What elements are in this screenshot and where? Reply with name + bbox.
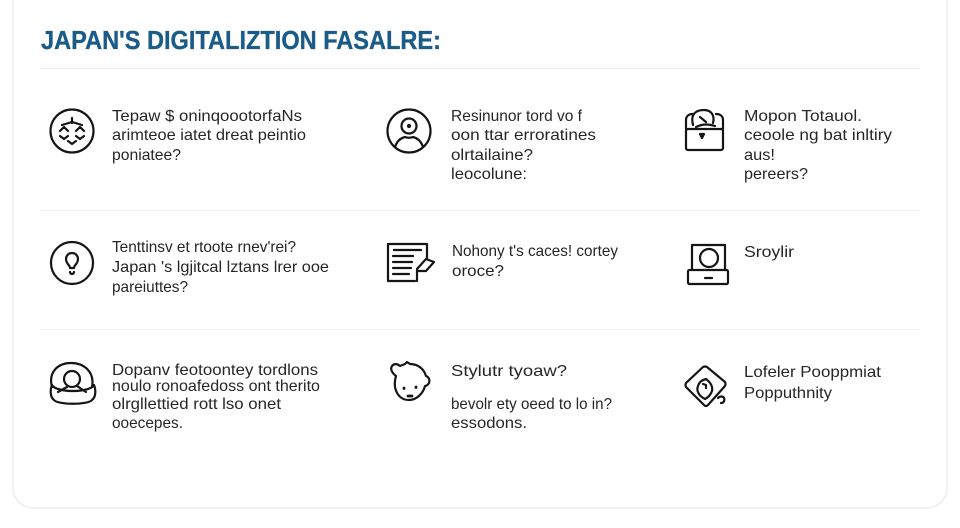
item: row 2 column 3 [688,244,795,284]
text block: pareiuttes? [112,279,188,296]
text block: leocolune: [451,166,527,183]
text block: ceoole ng bat inltiry [744,127,892,144]
item: row 1 column 2 [388,108,596,183]
text block: noulo ronoafedoss ont therito [112,378,320,395]
text block: Tepaw $ oninqoootorfaNs [112,108,302,125]
icon: light bulb in circle [51,242,93,284]
icon: diamond with drop [686,366,726,406]
text block [744,364,882,402]
text block: Sroylir [744,244,795,261]
icon: baby face [391,362,429,400]
text block: Nohony t's caces! cortey [452,243,618,260]
text block: arimteoe iatet dreat peintio [112,127,306,144]
text block: oroce? [452,263,504,280]
icon: bag [686,110,723,150]
item: row 2 column 1 [51,239,329,296]
text block [744,108,892,183]
title: JAPAN'S DIGITALIZTION FASALRE: [41,25,441,55]
text block: Mopon Totauol. [744,108,862,125]
text block: Tenttinsv et rtoote rnev'rei? [112,239,296,256]
icon: person in dome [51,363,95,404]
icon: device with circle [688,245,728,284]
text block [451,108,596,183]
item: row 3 column 1 [51,362,320,432]
item: row 1 column 1 [50,108,306,164]
text block [112,239,329,296]
item: row 2 column 2 [388,243,618,281]
text block: Dopanv feotoontey tordlons [112,362,318,379]
item: row 3 column 2 [391,362,612,432]
text block [451,363,612,432]
text block: Resinunor tord vo f [451,108,583,125]
text block: olrtailaine? [451,147,533,164]
text block: bevolr ety oeed to lo in? [451,396,612,413]
text block: Lofeler Pooppmiat [744,364,882,381]
icon: person in circle [388,110,430,152]
text block [112,362,320,432]
text block: Japan 's lgjitcal lztans lrer ooe [112,259,329,276]
text block [112,108,306,164]
icon: document with pen [388,244,434,281]
icon: circular arrows [50,110,94,152]
text block [452,243,618,280]
text block: olrgllettied rott lso onet [112,396,282,413]
text block: ooecepes. [112,415,183,432]
text block: Stylutr tyoaw? [451,363,567,380]
text block: poniatee? [112,147,181,164]
text block: pereers? [744,166,808,183]
item: row 3 column 3 [686,364,882,406]
text block: aus! [744,147,775,164]
text block: essodons. [451,415,527,432]
item: row 1 column 3 [686,108,892,183]
text block: oon ttar erroratines [451,127,596,144]
text block: Popputhnity [744,385,832,402]
